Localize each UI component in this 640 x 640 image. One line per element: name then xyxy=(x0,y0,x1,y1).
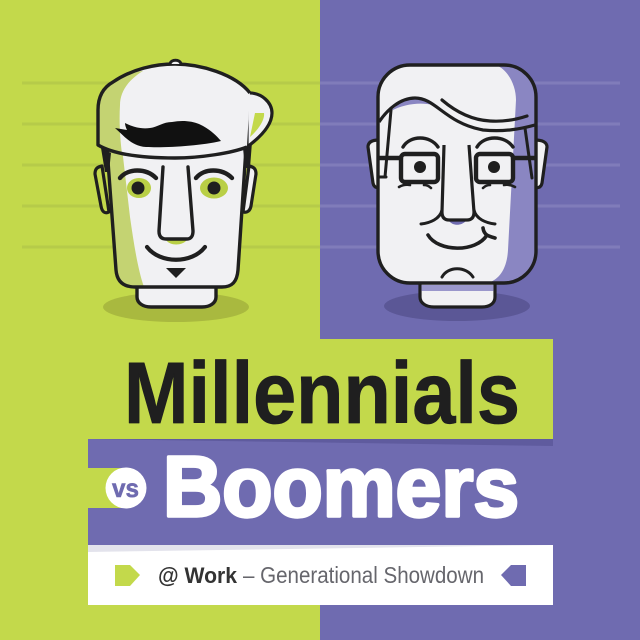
left eye xyxy=(120,170,156,198)
mouth xyxy=(147,247,205,260)
heading: Millennials: Millennials xyxy=(124,345,520,442)
subtitle: @ Work xyxy=(158,563,238,588)
soul patch xyxy=(166,268,186,278)
right eye xyxy=(196,170,232,198)
hair lines xyxy=(379,98,535,131)
ground shadow xyxy=(103,292,249,322)
mouth xyxy=(428,228,495,248)
sideburns xyxy=(101,142,252,172)
cap xyxy=(98,60,272,158)
subtitle: – Generational Showdown xyxy=(243,562,484,588)
badge: vs: vs xyxy=(112,473,139,503)
neck xyxy=(420,280,495,307)
ears xyxy=(368,140,547,188)
panel: millennial portrait xyxy=(95,60,272,322)
boomers band xyxy=(88,439,553,545)
cheek lines xyxy=(421,210,495,224)
icon: green tag xyxy=(115,565,140,586)
head xyxy=(378,65,536,283)
chin line xyxy=(442,269,473,277)
face xyxy=(101,142,252,287)
subtitle band xyxy=(88,545,553,605)
nose xyxy=(449,221,466,225)
glasses xyxy=(379,110,535,182)
vs tab xyxy=(88,468,126,508)
panel: title band xyxy=(88,339,553,605)
nose xyxy=(166,240,187,244)
hair quiff xyxy=(115,121,221,147)
ground shadow xyxy=(384,291,530,321)
panel: boomer portrait xyxy=(368,65,547,321)
brim of cap xyxy=(247,93,272,147)
millennials band xyxy=(320,339,553,439)
eyes xyxy=(414,161,500,173)
subtitle xyxy=(158,562,484,588)
badge: vs xyxy=(106,468,146,508)
ears xyxy=(95,166,256,213)
neck xyxy=(137,285,216,307)
heading: Boomers: Boomers xyxy=(163,440,519,535)
icon: purple tag xyxy=(501,565,526,586)
eyebrows and eye creases xyxy=(399,138,515,188)
